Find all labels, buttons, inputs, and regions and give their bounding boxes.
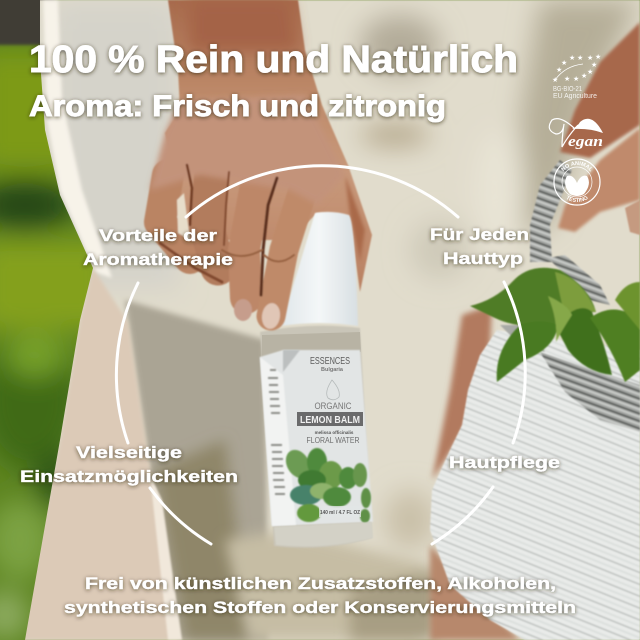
finger gaps and creases [177,193,190,240]
icon: no animal testing badge [553,158,601,206]
bottle label text: ESSENCES [310,356,350,367]
bottle label: Bulgaria [321,367,344,373]
back of hand [150,95,345,205]
right arm and hand [558,22,640,235]
label: Für Jeden Hauttyp: Für Jeden [430,225,529,244]
drop logo [327,380,339,400]
icon: EU organic badge [552,53,601,100]
bottle label: FLORAL WATER [306,435,360,445]
label: Für Jeden Hauttyp: Hauttyp [443,249,523,268]
icon: Vegan badge [549,119,603,150]
bottom statement [64,574,576,617]
hand: wrist and thumb behind cap [165,0,372,292]
bottle label [260,350,373,526]
label: Hautpflege: Hautpflege [449,453,560,472]
label: Vorteile der Aromatherapie: Aromatherapie [83,250,233,269]
bottom statement: synthetischen Stoffen oder Konservierungsmitteln [64,598,576,617]
bottle label: melissa officinalis [315,430,354,435]
woven basket [430,325,640,640]
icon: EU organic badge: EU Agriculture [553,93,597,100]
bottle label: ORGANIC [314,401,352,411]
title: 100 % Rein und Natürlich [29,39,518,81]
bottom statement: Frei von künstlichen Zusatzstoffen, Alkoholen, [85,574,556,593]
icon: no animal testing badge: NO ANIMAL [561,161,592,172]
label: Vielseitige Einsatzmöglichkeiten: Einsatzmöglichkeiten [20,467,238,486]
label: Vielseitige Einsatzmöglichkeiten: Vielseitige [76,443,182,462]
icon: Vegan badge: egan [568,134,603,150]
icon: no animal testing badge: TESTING [567,196,588,202]
mint leaves [470,268,640,382]
lower drape [125,300,268,640]
subtitle: Aroma: Frisch und zitronig [29,90,446,123]
product bottle: 140 ml / 4.7 FL OZ [320,510,361,516]
bottle glass [260,326,372,548]
label: Für Jeden Hauttyp [430,225,529,268]
product bottle [260,212,373,548]
terracotta arm behind basket [430,305,520,640]
icon: EU organic badge: BG-BIO-21 [553,86,582,93]
label: Vielseitige Einsatzmöglichkeiten [20,443,238,486]
circular arc segments [116,166,525,544]
label mint illustration [281,446,371,523]
fingernails [234,299,252,321]
pink skirt panel [20,268,178,640]
bottle cap [280,212,358,326]
bottle label: LEMON BALM [300,414,360,426]
icon: EU organic badge: ★★★★★★★★★★★★ [552,53,601,84]
hand: fingers in front of cap [150,95,345,330]
basket rope handle [530,160,572,262]
label: Vorteile der Aromatherapie: Vorteile der [99,226,217,245]
label: Vorteile der Aromatherapie [83,226,233,269]
